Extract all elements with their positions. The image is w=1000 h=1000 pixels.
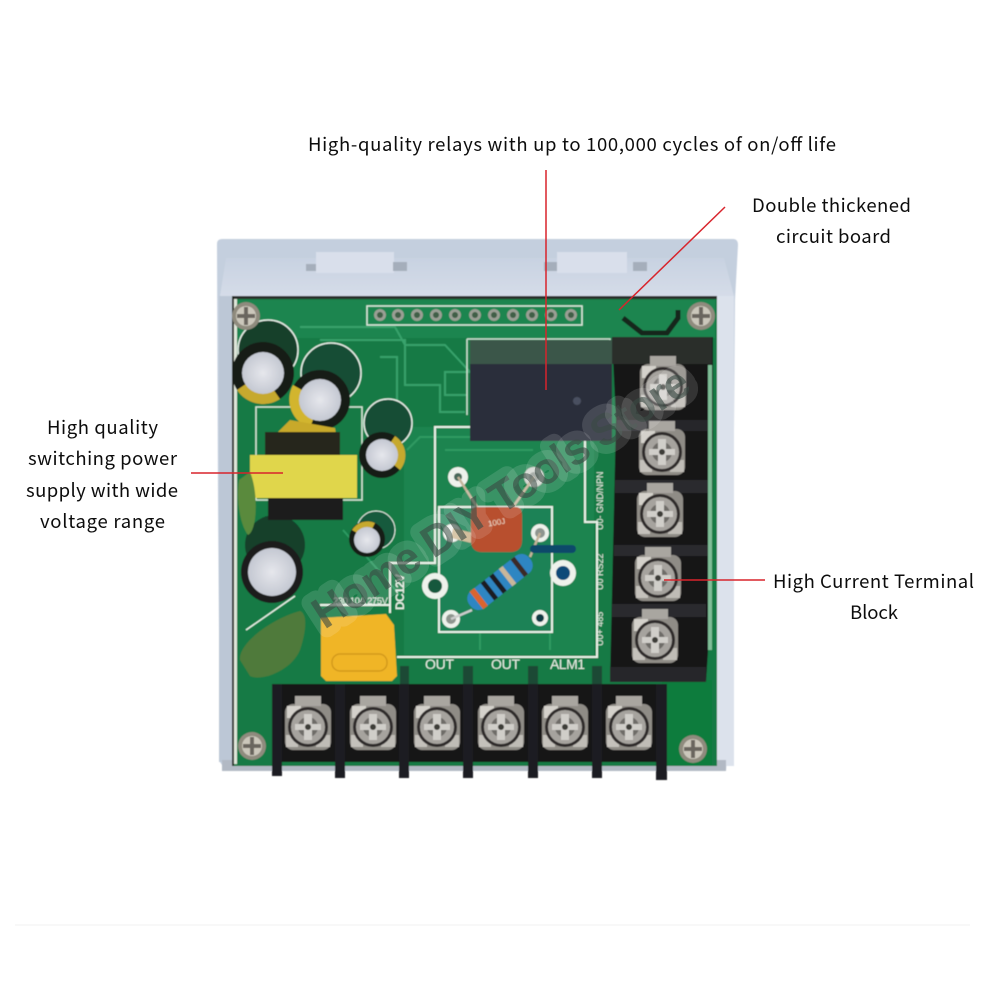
label: switching power supply: switching power bbox=[28, 445, 178, 471]
green circuit board bbox=[232, 296, 717, 766]
right terminal block bbox=[610, 337, 713, 682]
bottom terminal block bbox=[272, 666, 667, 780]
board silkscreen labels: OUT bbox=[491, 656, 520, 672]
label: switching power supply: High quality bbox=[47, 414, 158, 440]
label: terminal block: High Current Terminal bbox=[773, 568, 974, 594]
label: terminal block bbox=[773, 568, 974, 625]
callout line: circuit board bbox=[619, 207, 725, 310]
board silkscreen labels: DC12V bbox=[393, 574, 407, 610]
board silkscreen labels: U0+ 485 bbox=[595, 612, 605, 646]
label: circuit board bbox=[752, 192, 911, 249]
callout line: power supply bbox=[191, 472, 283, 474]
yellow transformer bbox=[250, 420, 357, 520]
product photo: relay control module bbox=[217, 239, 738, 780]
grey plastic housing bbox=[217, 239, 738, 771]
board silkscreen labels: U0- GND/NPN bbox=[595, 471, 605, 530]
label: switching power supply: voltage range bbox=[40, 508, 165, 534]
callout line: relays bbox=[545, 170, 547, 390]
label: switching power supply bbox=[26, 414, 178, 534]
right terminal green strip bbox=[708, 365, 712, 650]
watermark: store name: Home DIY Tools Store bbox=[303, 357, 699, 638]
centre components: red capacitor and striped resistor bbox=[422, 467, 576, 628]
centre components: red capacitor and striped resistor: 100J bbox=[487, 517, 506, 528]
board silkscreen labels: OUT bbox=[425, 656, 454, 672]
mounting screws bbox=[232, 302, 715, 763]
yellow film capacitor bbox=[321, 614, 397, 681]
label: terminal block: Block bbox=[850, 599, 899, 625]
callout line: terminal block bbox=[664, 579, 765, 581]
label: circuit board: circuit board bbox=[776, 223, 891, 249]
label: relays: High-quality relays with up to 100,000 cycles of on/off life bbox=[308, 131, 836, 157]
board silkscreen labels: 230 10A 275V bbox=[333, 596, 389, 607]
label: switching power supply: supply with wide bbox=[26, 477, 178, 503]
pin header bbox=[367, 306, 582, 325]
board silkscreen labels: U0 RS22 bbox=[595, 553, 605, 590]
label: circuit board: Double thickened bbox=[752, 192, 911, 218]
relay bbox=[470, 340, 612, 441]
green inductor bbox=[238, 472, 305, 678]
electrolytic capacitors bbox=[232, 320, 412, 603]
board silkscreen labels: ALM1 bbox=[550, 656, 585, 672]
board silkscreen labels bbox=[333, 471, 605, 672]
